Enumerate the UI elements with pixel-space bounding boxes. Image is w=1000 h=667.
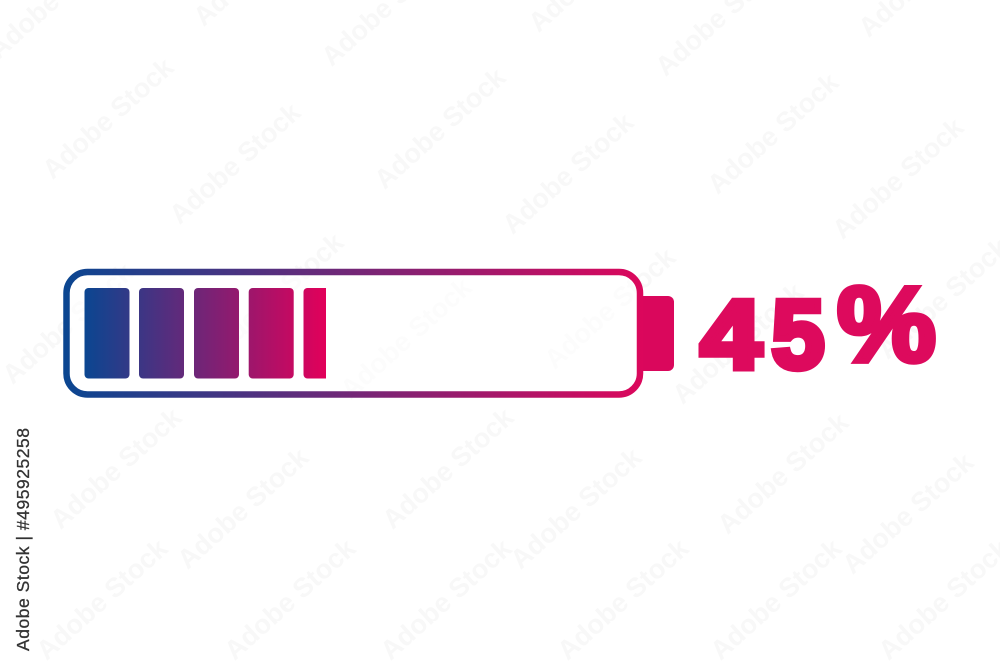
watermark pattern: Adobe Stock xyxy=(207,226,350,360)
watermark pattern: Adobe Stock xyxy=(375,532,518,666)
battery icon xyxy=(66,272,674,394)
cell 1 xyxy=(84,288,130,378)
watermark pattern: Adobe Stock xyxy=(377,401,520,535)
charge cells: 45 percent xyxy=(84,288,326,378)
battery outline xyxy=(66,272,640,394)
digit 4: 4 xyxy=(700,280,762,389)
percent sign: % xyxy=(837,264,936,384)
watermark pattern: Adobe Stock xyxy=(539,241,682,375)
watermark pattern: Adobe Stock xyxy=(552,532,695,666)
percentage label xyxy=(700,264,936,389)
watermark pattern: Adobe Stock xyxy=(37,51,180,185)
watermark pattern: Adobe Stock xyxy=(219,532,362,666)
stock id label: Adobe Stock | #495925258 xyxy=(13,428,33,651)
watermark pattern: Adobe Stock xyxy=(827,111,970,245)
watermark pattern: Adobe Stock xyxy=(0,256,140,390)
watermark pattern: Adobe Stock xyxy=(497,106,640,240)
cell 4 xyxy=(249,288,294,378)
watermark pattern: Adobe Stock xyxy=(702,66,845,200)
cell 2 xyxy=(139,288,184,378)
watermark pattern: Adobe Stock xyxy=(335,271,478,405)
cell 3 xyxy=(194,288,239,378)
watermark pattern: Adobe Stock xyxy=(705,532,848,666)
watermark pattern: Adobe Stock xyxy=(172,441,315,575)
digit 5: 5 xyxy=(772,280,824,389)
battery terminal xyxy=(641,296,674,371)
watermark pattern: Adobe Stock xyxy=(837,446,980,580)
cell 5 partial xyxy=(304,288,326,378)
watermark pattern: Adobe Stock xyxy=(667,276,810,410)
watermark pattern: Adobe Stock xyxy=(712,406,855,540)
watermark pattern: Adobe Stock xyxy=(369,61,512,195)
watermark pattern: Adobe Stock xyxy=(45,401,188,535)
watermark pattern: Adobe Stock xyxy=(505,441,648,575)
watermark pattern: Adobe Stock xyxy=(31,532,174,666)
watermark pattern: Adobe Stock xyxy=(164,96,307,230)
